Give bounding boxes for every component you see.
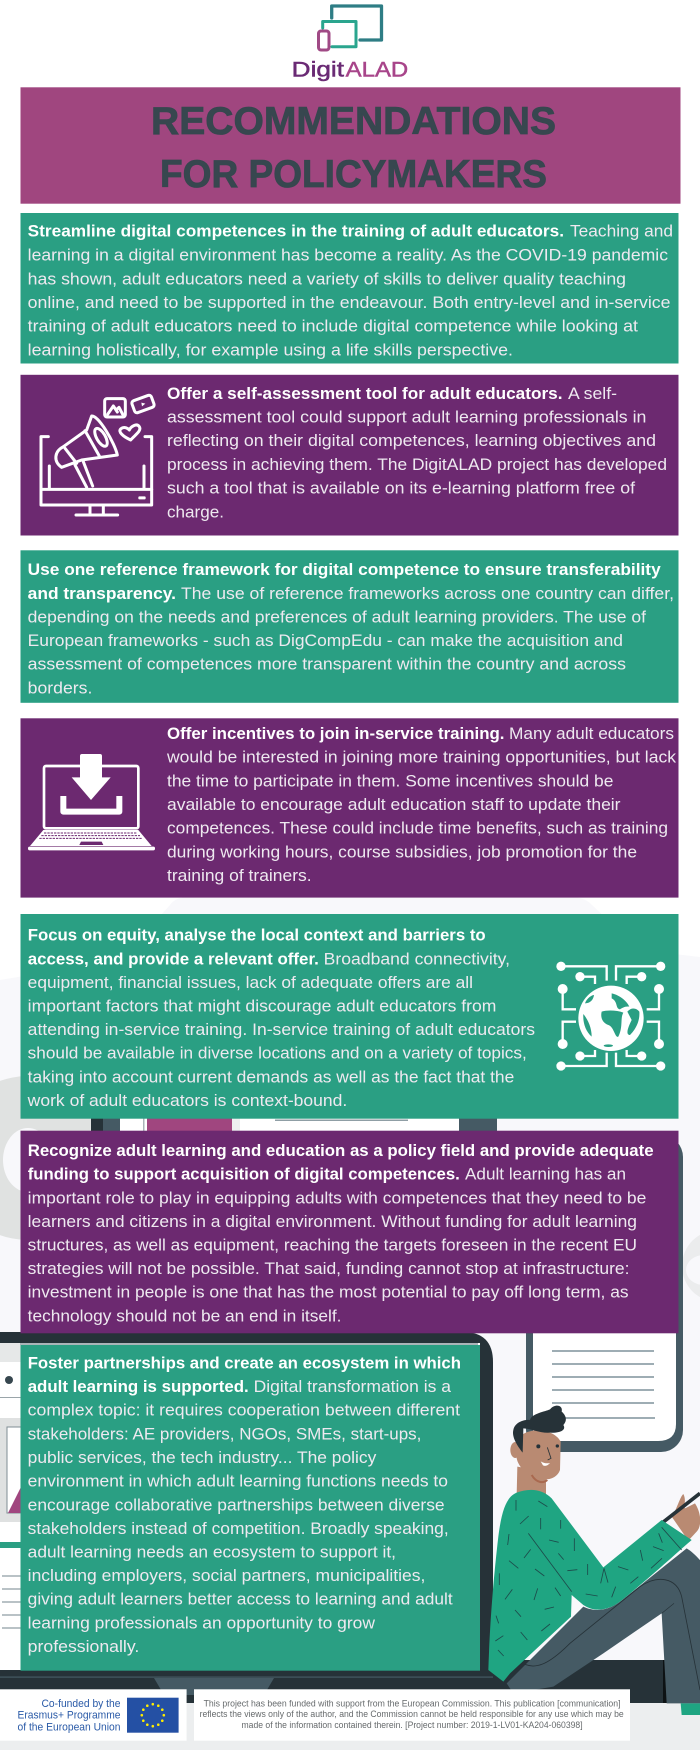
panel body text: borders. xyxy=(28,678,92,697)
panel heading: Streamline digital competences in the training of adult educators. xyxy=(28,222,564,241)
panel body text: learners and citizens in a digital environment. Without funding for adult learning xyxy=(28,1212,637,1231)
gear: right xyxy=(682,1230,700,1302)
panel body text: A self- xyxy=(568,384,617,403)
co-funding text xyxy=(18,1698,120,1733)
panel body text xyxy=(28,222,673,359)
face details xyxy=(536,1444,540,1448)
icon: megaphone on monitor xyxy=(41,395,155,515)
panel body text: process in achieving them. The DigitALAD project has developed xyxy=(167,455,667,474)
panel body text: stakeholders instead of competition. Broadly speaking, xyxy=(28,1519,449,1538)
panel: policy field and funding xyxy=(20,1131,678,1333)
panel body text: would be interested in joining more training opportunities, but lack xyxy=(166,748,677,767)
panel: streamline digital competences xyxy=(20,213,678,364)
panel body text: technology should not be an end in itself. xyxy=(28,1306,341,1325)
panel body text xyxy=(28,1377,460,1656)
illustration: man with phone xyxy=(488,1406,700,1715)
panel heading xyxy=(28,1141,654,1184)
panel body text: depending on the needs and preferences of adult learning providers. The use of xyxy=(28,607,646,626)
logo wordmark: Digit xyxy=(292,58,344,82)
panel body text xyxy=(28,584,674,697)
panel body text xyxy=(28,1165,646,1325)
background illustration: room with gears, monitor and man xyxy=(0,897,700,1750)
panel body text: attending in-service training. In-service training of adult educators xyxy=(28,1020,535,1039)
panel body text: stakeholders: AE providers, NGOs, SMEs, start-ups, xyxy=(28,1424,421,1443)
monitor xyxy=(0,1332,493,1703)
co-funding text: of the European Union xyxy=(18,1721,120,1733)
panel body text: important factors that might discourage adult educators from xyxy=(28,996,496,1015)
panel body text: Teaching and xyxy=(570,222,673,241)
icon: EU flag xyxy=(127,1698,179,1733)
panel body text: adult learning needs an ecosystem to support it, xyxy=(28,1542,396,1561)
panel body text: equipment, financial issues, lack of adequate offers are all xyxy=(28,973,473,992)
object behind the panels xyxy=(91,1112,497,1136)
disclaimer text: made of the information contained therein. [Project number: 2019-1-LV01-KA204-060398] xyxy=(242,1720,583,1730)
panel heading xyxy=(28,1353,461,1396)
panel body text: online, and need to be supported in the endeavour. Both entry-level and in-service xyxy=(28,293,670,312)
logo: DigitALAD xyxy=(292,6,408,82)
panel body text: professionally. xyxy=(28,1637,139,1656)
panel body text: learning in a digital environment has become a reality. As the COVID-19 pandemic xyxy=(28,246,669,264)
panel body text: The use of reference frameworks across one country can differ, xyxy=(181,584,674,603)
panel heading: adult learning is supported. xyxy=(28,1377,249,1396)
wall xyxy=(0,897,700,1703)
panel body text xyxy=(27,949,535,1110)
hair xyxy=(513,1406,566,1453)
panel heading: Focus on equity, analyse the local context and barriers to xyxy=(28,926,486,945)
co-funding text: Co-funded by the xyxy=(42,1698,120,1710)
floor xyxy=(0,1703,700,1750)
panel body text: available to encourage adult education staff to update their xyxy=(167,795,621,814)
panel body text: the time to participate in them. Some incentives should be xyxy=(167,771,613,790)
panel body text: should be available in diverse locations and on a variety of topics, xyxy=(28,1044,527,1063)
panel body text: work of adult educators is context-bound. xyxy=(27,1091,347,1110)
panel body text: reflecting on their digital competences, learning objectives and xyxy=(167,431,656,450)
panel: title xyxy=(20,87,680,204)
panel body text: charge. xyxy=(167,502,224,521)
panel heading: and transparency. xyxy=(28,584,176,603)
logo device icons xyxy=(318,6,382,50)
panel body text: has shown, adult educators need a variety of skills to deliver quality teaching xyxy=(28,269,626,288)
footer: disclaimer xyxy=(194,1689,630,1741)
panel body text: structures, as well as equipment, reaching the targets foreseen in the recent EU xyxy=(28,1236,637,1255)
panel: reference framework xyxy=(20,550,678,703)
panel body text: during working hours, course subsidies, job promotion for the xyxy=(167,842,637,861)
panel body text: Broadband connectivity, xyxy=(324,949,510,968)
icon: globe with circuit traces xyxy=(556,962,665,1071)
panel body text: including employers, social partners, municipalities, xyxy=(28,1566,425,1585)
sweater xyxy=(488,1490,692,1682)
panel body text: Adult learning has an xyxy=(465,1165,626,1184)
panel heading: Use one reference framework for digital competence to ensure transferability xyxy=(28,560,661,579)
panel: incentives xyxy=(20,718,678,898)
disclaimer text xyxy=(200,1698,624,1730)
panel heading: Offer incentives to join in-service training. xyxy=(167,724,504,743)
wall sign with text lines xyxy=(526,1135,683,1452)
panel body text: Many adult educators xyxy=(509,724,674,743)
panel body text: training of adult educators need to include digital competence while looking at xyxy=(28,317,638,336)
title: RECOMMENDATIONS xyxy=(151,100,556,143)
panel heading: Recognize adult learning and education as a policy field and provide adequate xyxy=(28,1141,654,1160)
panel heading: Foster partnerships and create an ecosystem in which xyxy=(28,1353,461,1372)
panel: partnerships and ecosystem xyxy=(20,1345,480,1671)
icon: laptop with download arrow xyxy=(28,754,155,850)
title: FOR POLICYMAKERS xyxy=(160,153,547,196)
panel body text: complex topic: it requires cooperation between different xyxy=(28,1401,460,1420)
panel: equity xyxy=(20,914,678,1119)
panel heading: funding to support acquisition of digital competences. xyxy=(28,1165,460,1184)
panel body text: taking into account current demands as well as the fact that the xyxy=(28,1067,514,1086)
panel heading: Offer a self-assessment tool for adult educators. xyxy=(167,384,562,403)
panel body text xyxy=(167,384,667,521)
panel heading xyxy=(28,560,661,603)
panel body text: investment in people is one that has the most potential to pay off long term, as xyxy=(28,1283,629,1302)
co-funding text: Erasmus+ Programme xyxy=(18,1710,120,1722)
panel body text: giving adult learners better access to learning and adult xyxy=(28,1590,453,1609)
panel body text: training of trainers. xyxy=(167,866,312,885)
disclaimer text: This project has been funded with support from the European Commission. This publication [communication] xyxy=(204,1698,620,1708)
neck xyxy=(517,1467,546,1495)
panel: self-assessment tool xyxy=(20,375,678,536)
panel body text: learning holistically, for example using a life skills perspective. xyxy=(28,340,513,359)
panel body text: Digital transformation is a xyxy=(254,1377,452,1396)
title xyxy=(151,100,556,196)
panel body text: assessment of competences more transparent within the country and across xyxy=(28,655,626,674)
sweater pattern xyxy=(495,1500,682,1656)
gear: left xyxy=(0,1076,110,1240)
panel body text: such a tool that is available on its e-learning platform free of xyxy=(167,479,635,498)
panel body text: European frameworks - such as DigCompEdu - can make the acquisition and xyxy=(28,631,623,650)
panel heading: access, and provide a relevant offer. xyxy=(28,949,319,968)
footer: Erasmus+ co-funding box xyxy=(0,1689,187,1741)
panel body text xyxy=(166,724,677,885)
logo: DigitALAD: ALAD xyxy=(346,58,408,82)
hand and phone xyxy=(672,1494,700,1541)
panel body text: public services, the tech industry... The policy xyxy=(28,1448,377,1467)
panel body text: strategies will not be possible. That said, funding cannot stop at infrastructure: xyxy=(28,1259,629,1278)
panel body text: assessment tool could support adult learning professionals in xyxy=(167,408,646,426)
panel body text: learning professionals an opportunity to grow xyxy=(28,1613,376,1632)
head xyxy=(517,1430,561,1479)
panel heading xyxy=(28,926,486,968)
shoe xyxy=(681,1703,700,1715)
trousers xyxy=(507,1548,700,1703)
disclaimer text: reflects the views only of the author, and the Commission cannot be held responsible for any use which may be xyxy=(200,1709,624,1719)
desk base xyxy=(0,1660,672,1703)
panel body text: important role to play in equipping adults with competences that they need to be xyxy=(28,1188,646,1207)
panel body text: encourage collaborative partnerships between diverse xyxy=(28,1495,445,1514)
panel body text: competences. These could include time benefits, such as training xyxy=(167,819,668,838)
panel body text: environment in which adult learning functions needs to xyxy=(28,1472,448,1491)
